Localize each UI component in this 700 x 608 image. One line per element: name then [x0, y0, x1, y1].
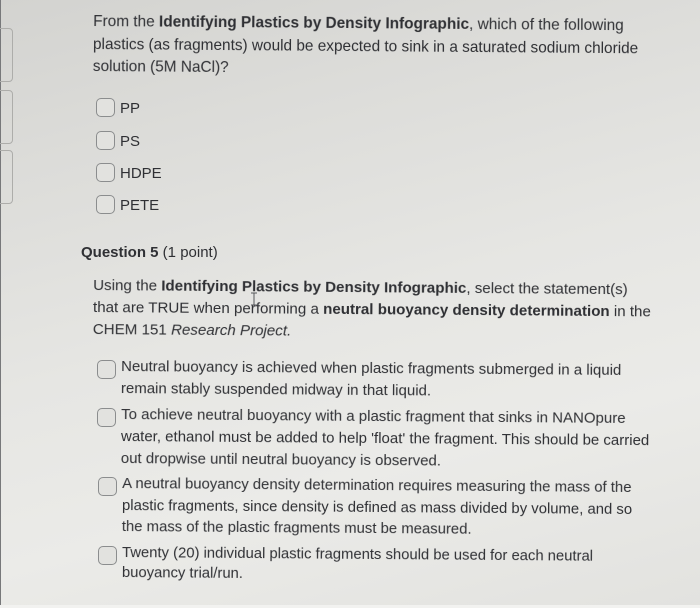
question 5 prompt: CHEM 151 Research Project. [93, 321, 291, 340]
statement 2: water, ethanol must be added to help 'float' the fragment. This should be carried [121, 428, 649, 449]
statement 2 [97, 406, 649, 469]
statement 1 [97, 358, 621, 399]
left edge sidebar [0, 0, 13, 605]
option: PP [96, 98, 140, 117]
question 4 prompt: plastics (as fragments) would be expected to sink in a saturated sodium chloride [93, 35, 638, 56]
question 5 prompt [93, 277, 651, 340]
statement 1: Neutral buoyancy is achieved when plastic fragments submerged in a liquid [121, 358, 621, 379]
question 5 prompt: Using the Identifying Plastics by Density Infographic, select the statement(s) [93, 277, 628, 298]
statement 3: plastic fragments, since density is defined as mass divided by volume, and so [122, 498, 632, 518]
icon: text cursor [251, 292, 257, 306]
statement 2: To achieve neutral buoyancy with a plastic fragment that sinks in NANOpure [121, 406, 626, 426]
option: HDPE [96, 163, 162, 182]
question 5 prompt: that are TRUE when performing a neutral buoyancy density determination in the [93, 299, 651, 320]
question 5 heading: Question 5 (1 point) [81, 244, 218, 261]
question 4 prompt: From the Identifying Plastics by Density Infographic, which of the following [93, 13, 624, 34]
statement 3 [98, 476, 632, 538]
option: HDPE: HDPE [120, 165, 162, 182]
option: PP: PP [120, 100, 140, 117]
statement 4 [98, 545, 593, 582]
option: PETE: PETE [120, 197, 159, 214]
option: PETE [96, 195, 159, 214]
option: PS: PS [120, 133, 140, 150]
option: PS [96, 131, 140, 150]
statement 3: A neutral buoyancy density determination requires measuring the mass of the [122, 476, 632, 496]
statement 2: out dropwise until neutral buoyancy is observed. [121, 449, 441, 469]
question 4 prompt [93, 13, 638, 76]
statement 3: the mass of the plastic fragments must be measured. [122, 519, 472, 538]
statement 4: Twenty (20) individual plastic fragments should be used for each neutral [122, 545, 593, 565]
question 4 prompt: solution (5M NaCl)? [93, 57, 229, 76]
statement 4: buoyancy trial/run. [122, 565, 243, 582]
statement 1: remain stably suspended midway in that liquid. [121, 380, 431, 399]
